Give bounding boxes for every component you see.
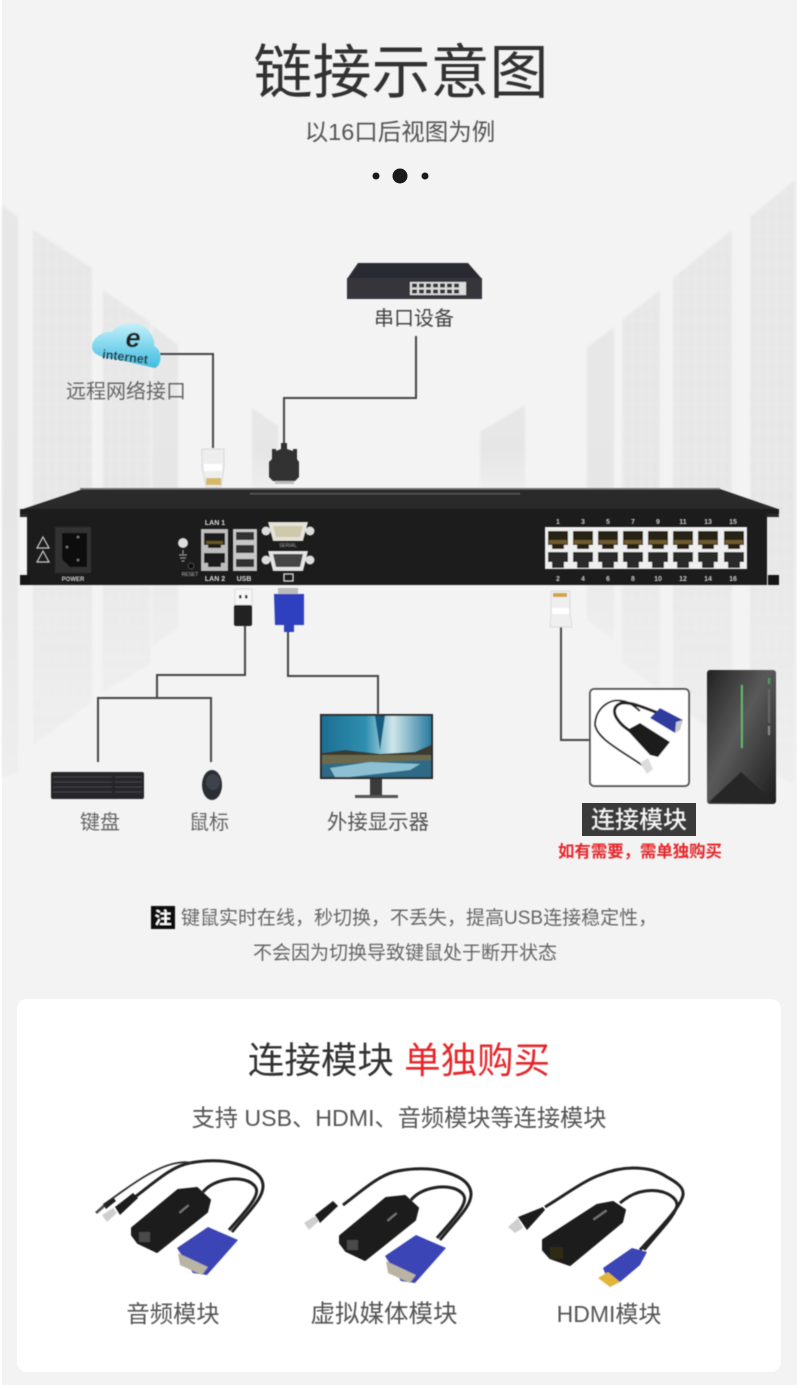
USB ports	[233, 529, 257, 583]
label: keyboard: 键盘	[80, 811, 120, 834]
LAN ports: LAN 1	[205, 520, 225, 527]
label: remote network port: 远程网络接口	[66, 380, 186, 403]
16 RJ45 ports: 6	[606, 576, 610, 583]
icon: USB plug	[234, 589, 252, 626]
background: server room buildings	[2, 180, 795, 785]
16 RJ45 ports: 14	[704, 576, 712, 583]
icon: internet cloud: internet	[102, 347, 150, 367]
note text: 不会因为切换导致键鼠处于断开状态	[253, 942, 557, 964]
icon: PC tower	[707, 670, 776, 804]
16 RJ45 ports: 5	[606, 519, 610, 526]
power inlet: POWER	[62, 577, 85, 583]
panel heading: 连接模块 单独购买	[248, 1040, 550, 1081]
icon: RJ45 plug top	[202, 449, 224, 487]
module: audio	[95, 1161, 263, 1275]
reset and LED	[178, 538, 198, 578]
note text: 键鼠实时在线，秒切换，不丢失，提高USB连接稳定性，	[181, 907, 657, 929]
module: virtual media	[304, 1169, 471, 1283]
note text	[151, 906, 657, 964]
16 RJ45 ports: 2	[556, 576, 560, 583]
16 RJ45 ports: 4	[581, 576, 585, 583]
16 RJ45 ports: 16	[729, 576, 737, 583]
serial and VGA ports: SERIAL	[279, 543, 297, 549]
KVM chassis rear panel	[20, 488, 779, 585]
icon: mouse	[202, 770, 222, 800]
icon: internet cloud: e	[125, 323, 141, 353]
16 RJ45 ports: 8	[631, 576, 635, 583]
label: virtual media module: 虚拟媒体模块	[310, 1300, 458, 1328]
16 RJ45 ports: 11	[679, 519, 687, 526]
icon: VGA plug	[274, 588, 304, 632]
subtitle: 以16口后视图为例	[305, 119, 495, 145]
icon: serial device switch	[347, 263, 482, 299]
label: serial device: 串口设备	[374, 307, 454, 330]
note text: 注	[154, 908, 172, 928]
16 RJ45 ports: 15	[729, 519, 737, 526]
LAN ports: LAN 2	[205, 576, 225, 583]
label: audio module: 音频模块	[126, 1301, 220, 1327]
icon: RJ45 plug bottom	[550, 591, 572, 627]
title: 链接示意图	[253, 40, 549, 106]
16 RJ45 ports: 7	[631, 519, 635, 526]
connection module label	[582, 803, 696, 836]
USB ports: USB	[237, 576, 251, 583]
icon: internet cloud	[92, 323, 160, 368]
label: HDMI module: HDMI模块	[557, 1301, 661, 1327]
red note: 如有需要，需单独购买	[558, 842, 722, 861]
16 RJ45 ports	[545, 519, 747, 583]
16 RJ45 ports: 1	[556, 519, 560, 526]
chassis body	[20, 488, 779, 585]
connection module label: 连接模块	[591, 807, 687, 834]
16 RJ45 ports: 9	[656, 519, 660, 526]
module: HDMI	[508, 1168, 683, 1287]
panel: connection modules sold separately	[17, 999, 781, 1372]
icon: serial connector	[269, 443, 299, 484]
16 RJ45 ports: 13	[704, 519, 712, 526]
panel subheading: 支持 USB、HDMI、音频模块等连接模块	[192, 1105, 606, 1131]
LAN ports	[201, 520, 228, 583]
label: external monitor: 外接显示器	[327, 811, 429, 834]
16 RJ45 ports: 3	[581, 519, 585, 526]
decorative dots	[372, 168, 428, 184]
16 RJ45 ports: 12	[679, 576, 687, 583]
reset and LED: RESET	[182, 572, 198, 578]
cables	[98, 336, 590, 762]
serial and VGA ports	[262, 522, 314, 581]
icon: external monitor	[320, 714, 433, 798]
icon: keyboard	[51, 772, 144, 799]
16 RJ45 ports: 10	[654, 576, 662, 583]
connection module box	[590, 689, 689, 786]
label: mouse: 鼠标	[189, 811, 229, 834]
power inlet	[37, 527, 91, 583]
